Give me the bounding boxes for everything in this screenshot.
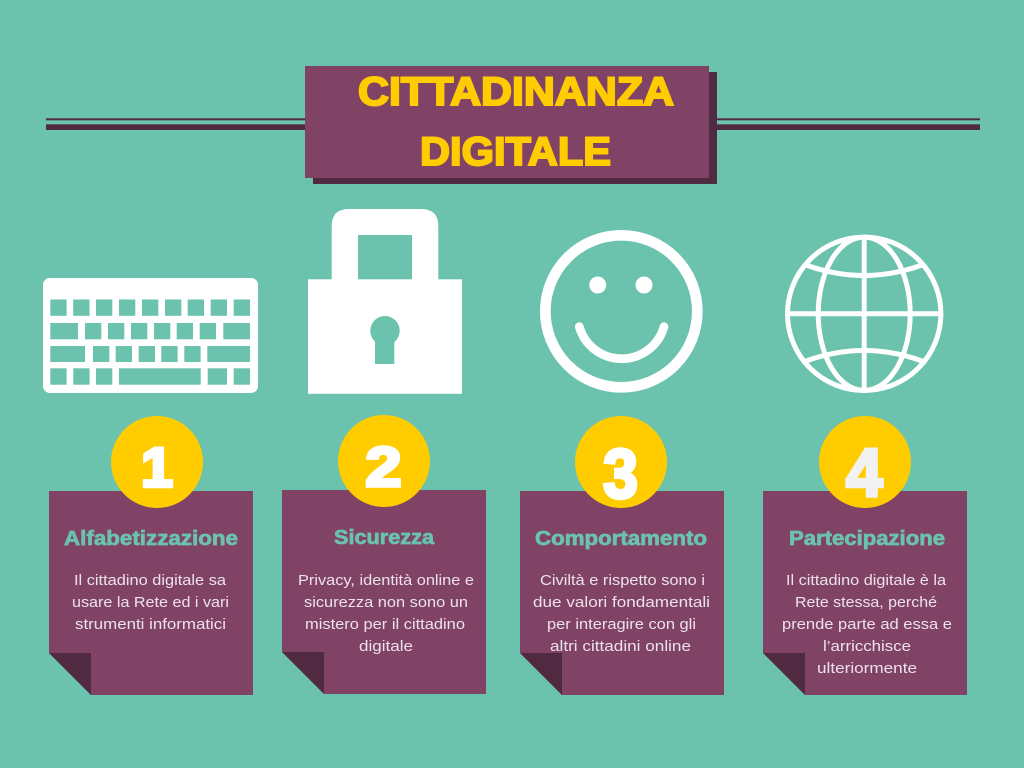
description 3: due valori fondamentali [533,594,710,611]
description 4: ulteriormente [817,660,917,677]
description 3: altri cittadini online [550,638,691,655]
title: CITTADINANZA [358,70,674,114]
number badge 3 [575,416,667,512]
description 2: Privacy, identità online e [298,572,474,589]
icon: keyboard [43,278,258,393]
number badge 2 [338,415,430,507]
description 4: Il cittadino digitale è la [786,572,947,589]
description 4: l’arricchisce [823,638,911,655]
number badge 4 [819,416,911,511]
description 1: strumenti informatici [75,616,226,633]
number badge 2: 2 [366,435,402,498]
icon: padlock [308,209,462,394]
icon: smiley [545,235,697,387]
description 1 [72,572,229,633]
description 2 [298,572,474,655]
title: DIGITALE [420,130,611,174]
description 2: digitale [359,638,413,655]
description 3 [533,572,710,655]
heading: Comportamento: Comportamento [535,528,707,550]
description 4: Rete stessa, perché [795,594,937,611]
heading: Partecipazione: Partecipazione [789,528,945,550]
description 4: prende parte ad essa e [782,616,952,633]
number badge 4: 4 [846,435,883,511]
panel: step 4 [763,416,967,695]
heading: Alfabetizzazione: Alfabetizzazione [64,528,238,550]
description 4 [782,572,952,677]
icon: globe [787,236,942,391]
description 1: usare la Rete ed i vari [72,594,229,611]
title banner [305,66,717,184]
number badge 3: 3 [603,434,638,512]
number badge 1 [111,416,203,508]
number badge 1: 1 [141,436,173,498]
title [358,70,674,174]
description 3: Civiltà e rispetto sono i [540,572,705,589]
description 2: mistero per il cittadino [305,616,465,633]
panel: step 2 [282,415,486,694]
heading: Sicurezza: Sicurezza [334,527,435,549]
panel: step 1 [49,416,253,695]
description 2: sicurezza non sono un [304,594,468,611]
description 1: Il cittadino digitale sa [74,572,227,589]
description 3: per interagire con gli [547,616,696,633]
panel: step 3 [520,416,724,695]
